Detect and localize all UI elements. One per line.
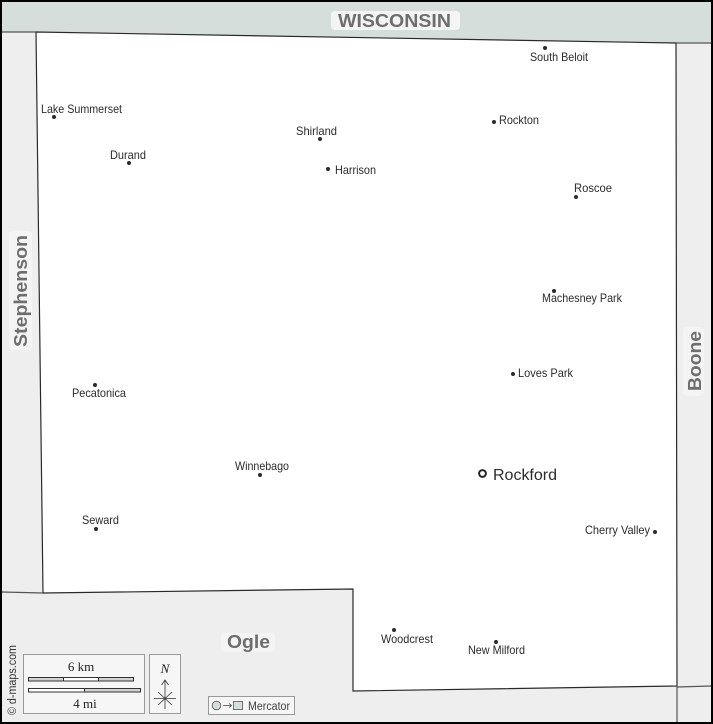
town: Pecatonica: Pecatonica [72, 386, 126, 400]
town: New Milford: New Milford [468, 643, 525, 657]
town: Roscoe: Roscoe [574, 181, 612, 195]
projection box: Mercator [208, 696, 294, 714]
town: Lake Summerset: Lake Summerset [41, 102, 123, 116]
label: Stephenson: Stephenson [11, 235, 31, 347]
town: Cherry Valley: Cherry Valley [585, 523, 650, 537]
town: Rockton: Rockton [499, 113, 539, 127]
town: Durand: Durand [110, 148, 146, 162]
label: Wisconsin: WISCONSIN [338, 11, 451, 31]
town: Winnebago: Winnebago [235, 459, 289, 473]
town: Woodcrest: Woodcrest [381, 632, 434, 646]
town: Loves Park: Loves Park [518, 366, 574, 380]
north arrow box [150, 654, 180, 714]
scale box: 6 km [68, 659, 94, 674]
credit: d-maps.com: © d-maps.com [7, 645, 19, 715]
north arrow box: N [160, 661, 171, 676]
town: Seward: Seward [82, 513, 119, 527]
scale box [24, 654, 144, 714]
scale box: 4 mi [73, 696, 97, 711]
town: South Beloit: South Beloit [530, 50, 589, 64]
town: Shirland: Shirland [296, 124, 337, 138]
projection box: Mercator: Mercator [248, 701, 290, 713]
label: Boone: Boone [685, 331, 705, 391]
town: Machesney Park: Machesney Park [542, 291, 623, 305]
town: Harrison: Harrison [335, 163, 376, 177]
label: Ogle: Ogle [227, 632, 270, 652]
city: Rockford: Rockford [493, 467, 557, 484]
region: Wisconsin [2, 2, 711, 43]
